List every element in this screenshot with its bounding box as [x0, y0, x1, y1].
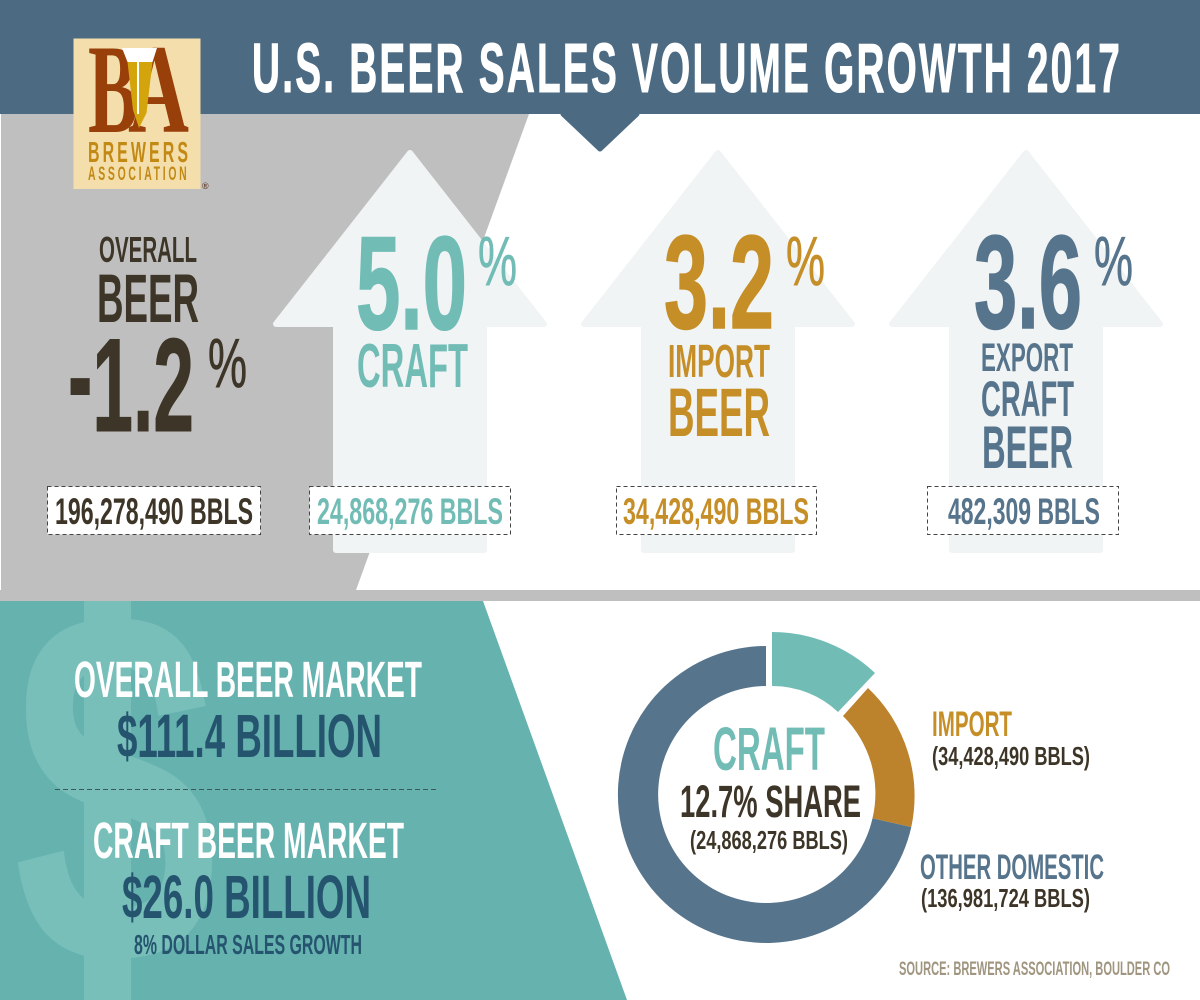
- text: craft barrels: (24,868,276 BBLS): [690, 825, 848, 855]
- stat: import growth: BEER: [668, 374, 770, 451]
- stat: craft growth: CRAFT: [357, 332, 468, 401]
- text: craft label: CRAFT: [713, 715, 825, 783]
- icon: brewers association logo: ®: [202, 181, 209, 191]
- stat: export growth: 3.6: [974, 209, 1082, 357]
- panel: overall beer: BEER: [97, 260, 199, 337]
- legend: import: [932, 705, 1090, 771]
- stat: import growth: [664, 209, 825, 451]
- panel: overall beer: [68, 229, 247, 460]
- heading: craft beer market: CRAFT BEER MARKET: [93, 812, 404, 869]
- stat: overall market value: $111.4 BILLION: [117, 702, 382, 770]
- header banner: [0, 0, 1200, 149]
- legend: import: (34,428,490 BBLS): [932, 741, 1090, 771]
- text: craft share: 12.7% SHARE: [680, 776, 861, 827]
- arrow: craft: [276, 153, 544, 550]
- callout: import barrels: [616, 486, 816, 534]
- icon: brewers association logo: B: [88, 20, 138, 160]
- icon: brewers association logo: ASSOCIATION: [88, 164, 189, 185]
- callout: overall barrels: 196,278,490 BBLS: [55, 491, 253, 532]
- arrow: export: [892, 153, 1160, 550]
- stat: export growth: BEER: [982, 414, 1073, 481]
- stat: craft growth: %: [478, 222, 517, 300]
- slice: craft: [772, 632, 875, 712]
- text: dollar sales growth: 8% DOLLAR SALES GROWTH: [134, 929, 362, 960]
- stat: craft market value: $26.0 BILLION: [122, 863, 371, 931]
- slice: import: [843, 688, 915, 827]
- slice: other domestic: [618, 646, 911, 943]
- stat: export growth: [974, 209, 1133, 481]
- panel: overall beer: %: [208, 324, 247, 402]
- callout: craft barrels: 24,868,276 BBLS: [317, 491, 503, 532]
- arrow: import: [584, 153, 852, 550]
- icon: brewers association logo: A: [128, 20, 189, 160]
- stat: craft growth: 5.0: [356, 210, 467, 358]
- stat: import growth: IMPORT: [668, 335, 770, 387]
- callout: export barrels: 482,309 BBLS: [948, 491, 1100, 532]
- callout: overall barrels: [48, 486, 260, 534]
- panel: gray background: [0, 114, 1200, 601]
- panel: market value: [0, 601, 627, 1000]
- icon: brewers association logo: [74, 20, 209, 191]
- panel: overall beer: -: [68, 302, 92, 450]
- legend: import: IMPORT: [932, 705, 1012, 744]
- icon: brewers association logo: BREWERS: [88, 136, 191, 168]
- legend: other domestic: [920, 848, 1104, 913]
- panel: overall beer: 1.2: [92, 312, 194, 460]
- heading: overall beer market: OVERALL BEER MARKET: [74, 651, 422, 708]
- callout: craft barrels: [310, 486, 510, 534]
- stat: import growth: 3.2: [664, 209, 774, 357]
- stat: export growth: CRAFT: [981, 371, 1074, 427]
- stat: export growth: EXPORT: [981, 336, 1073, 380]
- callout: import barrels: 34,428,490 BBLS: [623, 491, 809, 532]
- panel: overall beer: OVERALL: [99, 229, 197, 270]
- stat: import growth: %: [786, 222, 825, 300]
- stat: export growth: %: [1094, 222, 1133, 300]
- donut chart: [618, 632, 915, 943]
- legend: other domestic: (136,981,724 BBLS): [921, 883, 1090, 913]
- callout: export barrels: [928, 486, 1118, 534]
- stat: craft growth: [356, 210, 517, 401]
